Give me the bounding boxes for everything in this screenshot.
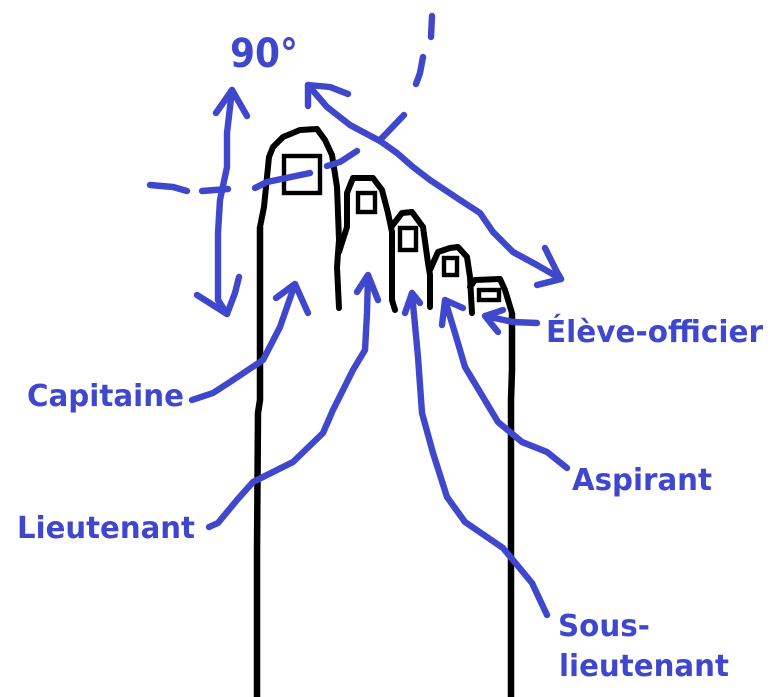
arrow: Élève-officier [485,310,537,332]
label: 90°: 90° [230,31,298,77]
label: Sous-lieutenant [558,609,729,684]
label: Aspirant: Aspirant [572,463,712,498]
arrow: Aspirant [442,300,567,468]
arrow: vertical height [197,90,247,314]
label: Sous-lieutenant: Sous- [558,609,650,644]
arrow: Lieutenant [209,275,378,527]
arrow: Capitaine [192,284,308,400]
label: Capitaine: Capitaine [27,379,184,414]
fingernails [284,156,499,300]
angle reference lines [150,16,432,191]
arrow: 90 degree arc [308,85,561,285]
label: Sous-lieutenant: lieutenant [559,649,729,684]
label: Lieutenant: Lieutenant [17,511,195,546]
arrow: Sous-lieutenant [405,293,547,615]
hand outline [257,129,512,697]
label: Élève-officier: Élève-officier [546,314,763,350]
